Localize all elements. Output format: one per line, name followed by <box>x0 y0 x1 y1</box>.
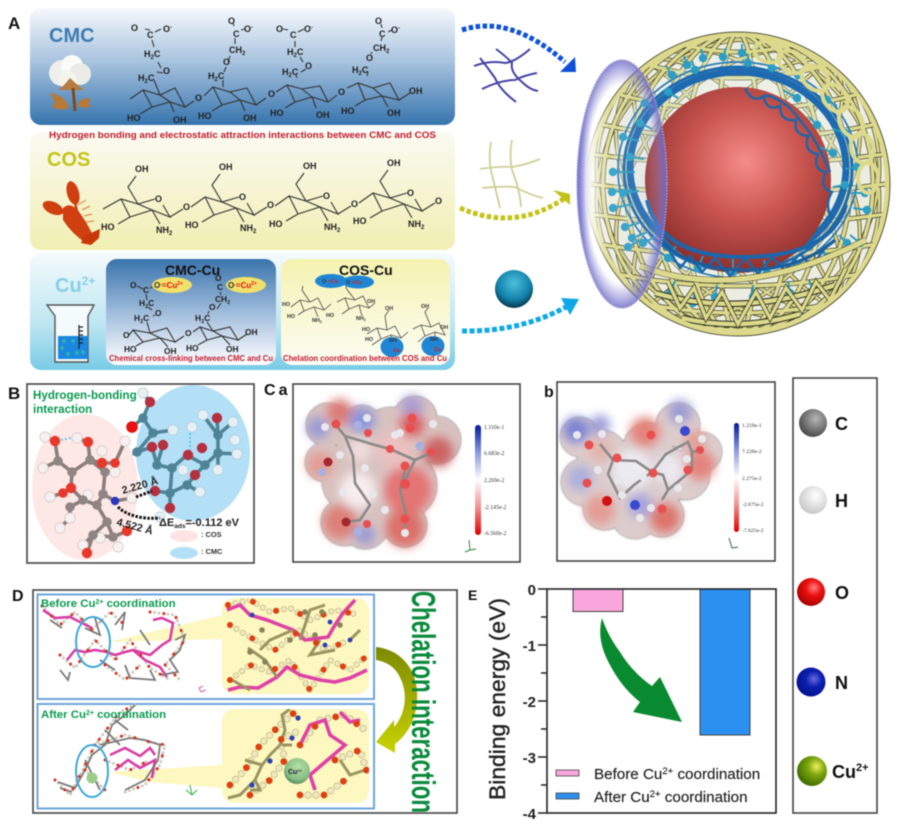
sub-panel: CMC-Cu: CMC-Cu <box>165 262 220 278</box>
COS structure <box>101 158 442 237</box>
icon: beaker <box>47 305 94 362</box>
COS structure: 2 <box>253 229 257 235</box>
CMC atom labels: O <box>304 24 311 34</box>
CMC atom labels: H <box>208 71 214 81</box>
CMC atom labels <box>127 16 422 125</box>
CMC atom labels: C <box>233 29 240 39</box>
zoom inset after <box>222 709 369 803</box>
sub-panel: CMC-Cu <box>106 259 276 365</box>
COS structure: NH <box>324 222 337 232</box>
CMC atom labels: CH <box>229 45 242 55</box>
CMC atom labels: OH <box>316 110 330 120</box>
Cu ion label: 2+ <box>297 768 303 773</box>
sub-panel: COS-Cu: 2 <box>320 320 322 324</box>
CMC atom labels: OH <box>243 113 256 123</box>
CMC atom labels: HO <box>270 108 284 118</box>
sub-panel: CMC-Cu: Chemical cross-linking between CMC and Cu <box>109 354 273 363</box>
legend N: N <box>835 673 848 693</box>
sub-panel: COS-Cu: HO <box>326 313 334 319</box>
legend: after: coordination <box>661 789 748 806</box>
colour scale b: 2.275e-2 <box>742 476 762 482</box>
sub-panel: CMC-Cu: O <box>228 281 234 290</box>
panel: ESP map b <box>557 382 775 561</box>
legend CMC: : CMC <box>201 547 223 556</box>
y tick labels <box>523 582 537 823</box>
sub-panel: COS-Cu: HO <box>362 327 370 333</box>
COS structure: 2 <box>421 225 425 231</box>
CMC atom labels: O <box>244 24 251 34</box>
CMC atom labels: C <box>379 29 386 39</box>
adsorption energy: ads <box>174 523 186 530</box>
panel: atom legend <box>793 378 877 813</box>
panel label E: E <box>468 587 477 603</box>
sub-panel: CMC-Cu: =Cu <box>162 281 177 290</box>
heading after: 2+ <box>86 710 94 717</box>
bar: after coordination <box>700 589 750 735</box>
zoom inset before <box>222 598 369 694</box>
inset molecules after <box>228 709 368 798</box>
sub-panel: CMC-Cu: C <box>143 285 149 295</box>
cut-away lens <box>577 60 667 308</box>
sub-panel: CMC-Cu: H <box>139 298 145 308</box>
y tick labels: -4 <box>523 806 537 823</box>
legend Cu2+ <box>797 756 869 786</box>
colour scale a: 2.269e-2 <box>484 478 505 484</box>
sub-panel: COS-Cu: HO <box>287 314 295 320</box>
colour scale b: 1.218e-1 <box>742 423 762 429</box>
bar: before coordination <box>573 589 623 612</box>
icon: cotton <box>49 55 91 111</box>
molecule after <box>55 705 165 795</box>
legend: before: 2+ <box>662 766 674 777</box>
heading line 2: interaction <box>33 403 92 416</box>
COS background <box>30 132 455 250</box>
sub-panel: COS-Cu: 2 <box>364 318 366 322</box>
COS region <box>32 414 138 560</box>
CMC atom labels: C <box>154 49 161 59</box>
upper right yellow scallops <box>752 38 879 193</box>
CMC structure <box>127 16 422 125</box>
arrow: COS to capsule <box>460 190 570 218</box>
CMC atom labels: - <box>251 25 253 31</box>
legend C <box>799 409 848 437</box>
CMC atom labels: OH <box>409 86 422 96</box>
COS structure: NH <box>156 225 169 235</box>
COS structure: O <box>351 199 358 209</box>
sub-panel: COS-Cu: NH <box>389 338 397 344</box>
sub-panel: CMC-Cu: 2 <box>227 300 230 306</box>
COS structure: OH <box>219 162 232 172</box>
sub-panel: COS-Cu: Chelation coordination between COS and Cu <box>283 354 447 363</box>
surface potential colours <box>307 395 453 547</box>
heading before: 2+ <box>95 599 103 606</box>
capsule illustration <box>576 30 892 338</box>
highlight ellipse before <box>76 617 110 667</box>
sub-panel: COS-Cu: O =Cu <box>322 279 338 285</box>
sub-panel: COS-Cu: Cu <box>434 347 441 353</box>
legend: before: coordination <box>673 766 760 783</box>
icon: CMC network <box>474 49 538 102</box>
sub-panel: COS-Cu: HO <box>365 337 373 343</box>
CMC atom labels: O <box>338 87 345 97</box>
CMC region <box>136 385 250 521</box>
CMC atom labels: OH <box>387 108 400 118</box>
colour scale b: -7.625e-2 <box>742 528 764 534</box>
y tick labels: -1 <box>523 638 536 655</box>
panel label C a: Ca <box>264 382 288 399</box>
axis triad before <box>199 686 206 692</box>
distance label 2.220: 2.220 Å <box>120 474 160 497</box>
sub-panel: CMC-Cu: 2+ <box>177 281 183 287</box>
Cu ion label: Cu <box>288 769 297 776</box>
CMC atom labels: O <box>375 16 382 26</box>
legend: before <box>556 766 760 783</box>
COS structure: OH <box>387 158 400 168</box>
sub-panel: COS-Cu: COS-Cu <box>339 262 393 278</box>
CMC atom labels: O <box>391 25 398 35</box>
legend: after <box>556 789 748 806</box>
sub-panel: after coordination <box>38 704 374 808</box>
icon: Cu ion sphere <box>495 270 533 308</box>
sub-panel: COS-Cu: OH <box>421 304 429 310</box>
CMC atom labels: 2 <box>288 73 292 79</box>
COS structure: NH <box>240 223 253 233</box>
CMC atom labels: C <box>148 73 155 83</box>
COS structure: NH <box>408 219 421 229</box>
sub-panel: CMC-Cu: 2+ <box>251 281 257 287</box>
sub-panel: CMC-Cu: HO <box>124 344 137 354</box>
zoom beam after <box>108 765 222 788</box>
CMC atom labels: 2 <box>242 51 246 57</box>
COS structure: HO <box>353 216 366 226</box>
CMC atom labels: HO <box>127 113 140 123</box>
sub-panel: CMC-Cu: O <box>155 308 162 318</box>
panel label A: A <box>8 14 20 33</box>
sub-panel: CMC-Cu: =Cu <box>236 281 251 290</box>
CMC atom labels: 2 <box>386 49 390 55</box>
CMC atom labels: O <box>276 24 283 34</box>
yellow front shell bands <box>586 32 890 336</box>
hydrogen bonding caption: Hydrogen bonding and electrostatic attraction interactions between CMC and COS <box>49 130 437 141</box>
COS structure: HO <box>185 220 198 230</box>
CMC atom labels: O <box>268 89 275 99</box>
CMC atom labels: 2 <box>144 79 148 85</box>
COS molecule <box>38 432 137 558</box>
legend CMC <box>170 547 223 559</box>
COS heading: COS <box>47 149 90 171</box>
sub-panel: COS-Cu: OH <box>440 325 448 331</box>
y tick labels: 0 <box>528 582 536 599</box>
sub-panel: COS-Cu: Cu <box>393 348 400 354</box>
COS structure: HO <box>101 222 114 232</box>
COS structure: O <box>407 188 414 198</box>
heading after: After Cu <box>41 709 86 721</box>
CMC atom labels: - <box>311 25 313 31</box>
adsorption energy: ΔE <box>159 517 174 529</box>
sub-panel: CMC-Cu: C <box>148 298 154 308</box>
fill between lobes b <box>561 404 721 538</box>
sub-panel: CMC-Cu: O <box>215 273 222 283</box>
blue scallop lattice over core <box>647 88 846 276</box>
sub-panel: CMC-Cu: CH <box>215 294 227 304</box>
legend O <box>797 578 849 606</box>
heading before: coordination <box>103 598 176 610</box>
CMC atom labels: H <box>287 47 294 57</box>
axis triad b <box>729 538 738 548</box>
colour scale b: 7.228e-2 <box>742 449 762 455</box>
CMC atom labels: O <box>366 53 373 63</box>
sub-panel: CMC-Cu: - <box>234 282 236 288</box>
sub-panel: CMC-Cu: OH <box>245 327 258 337</box>
CMC atom labels: C <box>292 67 299 77</box>
outer shell lattice <box>590 36 886 332</box>
CMC atom labels: O <box>228 16 235 26</box>
colour scale a: 6.683e-2 <box>484 451 505 457</box>
panel: COS <box>30 130 455 250</box>
CMC atom labels: H <box>282 67 288 77</box>
CMC atom labels: C <box>218 71 225 81</box>
COS structure: O <box>323 191 330 201</box>
fill between lobes <box>318 406 436 544</box>
axis triad a <box>465 540 476 552</box>
CMC molecule <box>126 388 242 522</box>
COS structure: 2 <box>169 231 173 237</box>
sub-panel: COS-Cu <box>281 259 450 365</box>
curved arrow: before to after <box>376 647 417 753</box>
ball-and-stick linkers <box>608 44 871 307</box>
legend H <box>799 486 848 514</box>
CMC atom labels: C <box>147 30 154 40</box>
zoom beam before <box>108 615 223 642</box>
sub-panel: CMC-Cu: H <box>134 313 140 323</box>
panel label b: b <box>544 384 554 401</box>
colour scale b: -2.675e-2 <box>742 502 764 508</box>
CMC atom labels: O <box>195 93 202 103</box>
y axis title: Binding energy (eV) <box>485 598 510 800</box>
inset molecules before <box>227 600 368 690</box>
CMC atom labels: 2 <box>214 77 218 83</box>
adsorption energy: =-0.112 eV <box>185 517 240 529</box>
heading before: Before Cu <box>41 598 95 610</box>
sub-panel: CMC-Cu: OH <box>226 344 239 354</box>
sub-panel: CMC-Cu: 2 <box>145 304 148 310</box>
panel: binding energy chart <box>485 582 776 823</box>
panel: ESP map a <box>293 384 520 562</box>
sub-panel: COS-Cu: NH <box>312 318 320 324</box>
Cu ion small <box>86 772 98 784</box>
sub-panel: CMC-Cu: H <box>195 313 201 323</box>
Cu heading: 2+ <box>82 274 95 288</box>
colour scale a: 1.110e-1 <box>484 425 504 431</box>
legend Cu2+: Cu <box>832 762 856 782</box>
panel label D: D <box>12 588 24 605</box>
sub-panel: COS-Cu: OH <box>367 299 375 305</box>
Cu heading: Cu <box>55 275 82 297</box>
COS structure: O <box>435 196 442 206</box>
legend COS <box>170 530 222 542</box>
COS structure: O <box>267 200 274 210</box>
CMC atom labels: OH <box>173 115 186 125</box>
sub-panel: COS-Cu: HO <box>282 302 290 308</box>
sub-panel: CMC-Cu: C <box>217 282 223 292</box>
sub-panel: CMC-Cu: O <box>185 328 192 338</box>
COS structure: OH <box>303 161 316 171</box>
CMC atom labels: O <box>223 57 230 67</box>
COS structure: O <box>155 194 162 204</box>
CMC atom labels: O <box>305 61 312 71</box>
legend C: C <box>835 414 848 434</box>
CMC heading: CMC <box>49 25 95 47</box>
sub-panel: COS-Cu: NH <box>430 337 438 343</box>
colour scale a: -6.560e-2 <box>484 531 506 537</box>
legend: before: Before Cu <box>594 766 662 783</box>
CMC atom labels: O <box>163 24 170 34</box>
CMC atom labels: HO <box>198 111 212 121</box>
CMC atom labels: 2 <box>150 55 154 61</box>
sub-panel: CMC-Cu: C <box>204 313 210 323</box>
axis triad after <box>186 785 197 795</box>
sub-panel: COS-Cu: O =Cu <box>346 280 362 286</box>
colour scale a: -2.145e-2 <box>484 505 506 511</box>
arrow: Cu to capsule <box>462 298 579 331</box>
colour scale a <box>475 425 506 537</box>
legend: after: After Cu <box>594 789 650 806</box>
sub-panel: CMC-Cu: 2 <box>140 319 143 325</box>
highlight ellipse after <box>76 745 108 797</box>
COS structure: 2 <box>337 228 341 234</box>
panel: chelation interaction <box>33 590 457 813</box>
sub-panel: CMC-Cu: HO <box>186 343 199 353</box>
electrostatic surface b <box>560 400 722 539</box>
Cu background <box>30 253 455 370</box>
sub-panel: CMC-Cu: - <box>160 282 162 288</box>
molecule before <box>42 606 185 680</box>
electrostatic surface a <box>305 395 461 549</box>
arrow: CMC to capsule <box>462 26 576 72</box>
CMC atom labels: C <box>290 30 297 40</box>
sub-panel: CMC-Cu: O <box>154 281 160 290</box>
CMC atom labels: H <box>144 49 150 59</box>
COS structure: OH <box>135 164 148 174</box>
y tick labels: -3 <box>523 750 536 767</box>
sub-panel: CMC-Cu: OH <box>164 346 177 356</box>
heading after: coordination <box>94 709 166 721</box>
CMC atom labels: C <box>297 47 304 57</box>
legend COS: : COS <box>201 530 222 539</box>
CMC atom labels: HO <box>341 106 354 116</box>
blue inner shell ring <box>618 62 858 278</box>
CMC atom labels: 2 <box>294 53 298 59</box>
y tick labels: -2 <box>523 694 536 711</box>
red core sphere <box>645 87 831 273</box>
legend O: O <box>835 583 849 603</box>
panel: CMC <box>30 8 455 125</box>
panel label B: B <box>8 384 20 403</box>
CMC atom labels: - <box>170 25 172 31</box>
Cu ion label <box>284 758 310 784</box>
COS structure: HO <box>269 219 282 229</box>
CMC atom labels: H <box>352 65 358 75</box>
CMC atom labels: CH <box>373 43 386 53</box>
sub-panel: CMC-Cu: C <box>143 313 149 323</box>
colour scale b <box>734 423 764 534</box>
arrow: decrease <box>600 618 682 722</box>
panel: Cu2+ <box>30 253 455 370</box>
CMC atom labels: H <box>138 73 144 83</box>
sub-panel: CMC-Cu: O <box>123 330 130 340</box>
CMC atom labels: O <box>131 23 138 33</box>
sub-panel: CMC-Cu: 2 <box>201 319 204 325</box>
legend N <box>796 668 848 696</box>
sub-panel: CMC-Cu: O <box>209 302 216 312</box>
icon: crayfish <box>40 180 100 245</box>
COS structure: O <box>239 192 246 202</box>
sub-panel: COS-Cu: OH <box>385 306 393 312</box>
CMC atom labels: C <box>362 65 369 75</box>
legend: after: 2+ <box>650 789 661 800</box>
sub-panel: COS-Cu: NH <box>356 316 364 322</box>
sub-panel: CMC-Cu: O <box>130 280 137 290</box>
axes <box>547 589 776 813</box>
legend Cu2+: 2+ <box>856 762 869 774</box>
icon: COS network <box>480 140 543 208</box>
legend H: H <box>835 491 848 511</box>
hydrogen bond dots <box>118 491 160 518</box>
heading: Hydrogen-bonding <box>33 389 137 402</box>
surface potential colours b <box>563 400 715 533</box>
COS structure: O <box>183 202 190 212</box>
y ticks <box>538 589 547 813</box>
CMC background <box>30 8 455 125</box>
panel: hydrogen-bonding interaction <box>27 384 254 563</box>
sub-panel: before coordination <box>38 594 374 699</box>
CMC atom labels: - <box>398 26 400 32</box>
distance label 4.522: 4.522 Å <box>115 515 155 538</box>
inner cavity <box>613 57 857 283</box>
CMC atom labels: O <box>163 66 170 76</box>
CMC atom labels: 2 <box>358 71 362 77</box>
